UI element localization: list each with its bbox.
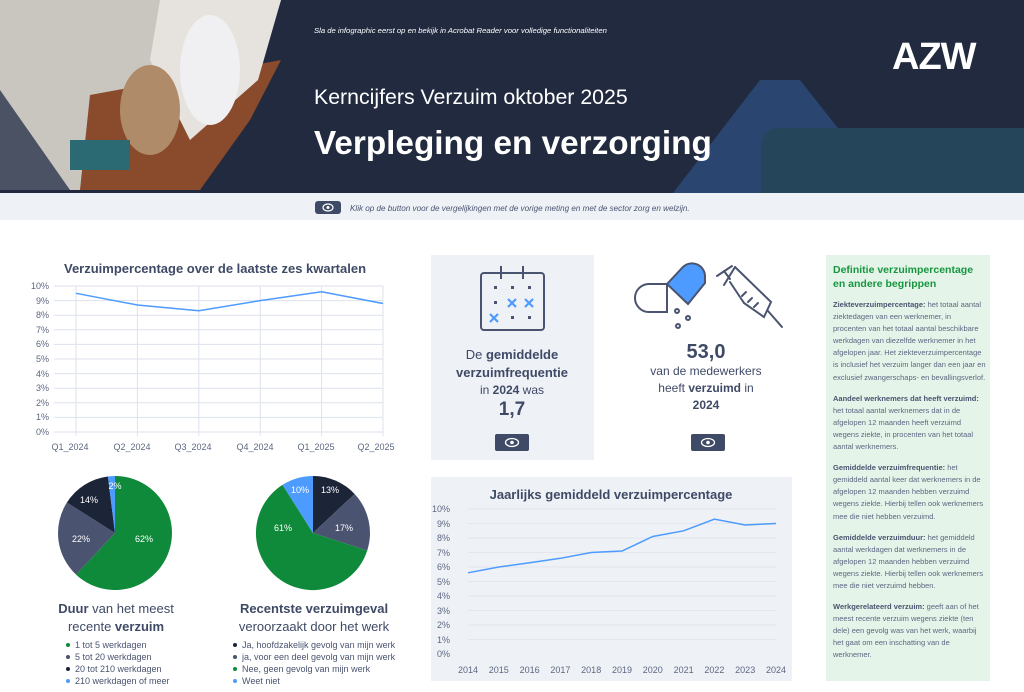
chart: yearly: 2019 [612,665,632,675]
chart: yearly: 3% [437,606,450,616]
panel: definitions: Ziekteverzuimpercentage: het totaal aantal ziektedagen van een werknemer, in procenten van het totaal aantal beschikbare werkdagen van diezelfde werknemer in het afgelopen jaar. Het ziekteverzuimpercentage is inclusief het verzuim langer dan een jaar en exclusief zwangerschaps- en bevallingsverlof. [833,300,986,382]
panel: definitions: Werkgerelateerd verzuim: geeft aan of het meest recente verzuim wegens ziekte (ten dele) een gevolg was van het werk, waarbij het gaat om een inschatting van de werknemer. [833,602,979,659]
chart: quarterly: Q4_2024 [236,442,274,452]
legend: duur: 20 tot 210 werkdagen [75,664,162,674]
icon: calendar [481,266,544,330]
info strip [0,193,1024,220]
chart: yearly: 8% [437,533,450,543]
chart: yearly: 2023 [735,665,755,675]
card: verzuimfrequentie: in 2024 was [480,383,544,397]
legend: duur: 1 tot 5 werkdagen [75,640,147,650]
chart: quarterly: 0% [36,427,49,437]
pie: duur: 22% [72,534,90,544]
chart: yearly: 2022 [704,665,724,675]
chart: quarterly: 1% [36,412,49,422]
chart: quarterly: Q3_2024 [174,442,212,452]
title: Verpleging en verzorging [314,125,712,162]
card: verzuimd: 53,0 [687,341,725,363]
header background [0,0,1024,208]
panel: definitions [826,255,990,681]
legend: werk [233,640,396,686]
pie: werk caption: Recentste verzuimgeval [240,601,388,616]
chart: quarterly: Q2_2025 [357,442,395,452]
chart: yearly: 2017 [550,665,570,675]
chart: yearly: 5% [437,577,450,587]
chart: yearly: 6% [437,562,450,572]
chart: quarterly [31,261,395,452]
card: verzuimfrequentie: De gemiddelde [466,347,558,362]
chart: yearly [431,477,792,681]
chart: quarterly: 4% [36,369,49,379]
info strip: Klik op de button voor de vergelijkingen met de vorige meting en met de sector zorg en welzijn. [350,204,690,213]
header note: Sla de infographic eerst op en bekijk in Acrobat Reader voor volledige functionaliteiten [314,26,607,35]
pie: duur: 62% [135,534,153,544]
chart: yearly: 2024 [766,665,786,675]
card: verzuimfrequentie [431,255,594,460]
chart: yearly: 2015 [489,665,509,675]
chart: yearly: 2020 [643,665,663,675]
panel: definitions: Definitie verzuimpercentage en andere begrippen [833,264,973,290]
subtitle: Kerncijfers Verzuim oktober 2025 [314,85,628,109]
chart: yearly: 10% [432,504,450,514]
chart: quarterly: Verzuimpercentage over de laatste zes kwartalen [64,261,366,276]
chart: quarterly: 10% [31,281,49,291]
chart: quarterly: Q1_2025 [297,442,335,452]
chart: quarterly: Q2_2024 [113,442,151,452]
pie: duur caption: Duur van het meest [58,601,174,616]
card: verzuimfrequentie: 1,7 [499,399,525,420]
card: verzuimd: van de medewerkers [650,364,762,378]
pie: werk: 13% [321,485,339,495]
chart: quarterly: 6% [36,339,49,349]
pie: werk caption [239,601,390,634]
legend: duur: 210 werkdagen of meer [75,676,170,686]
button: eye [495,434,529,451]
chart: yearly: 2% [437,620,450,630]
button: eye [691,434,725,451]
legend: duur: 5 tot 20 werkdagen [75,652,152,662]
chart: yearly: Jaarlijks gemiddeld verzuimpercentage [490,487,732,502]
pie: duur [58,476,172,590]
chart: yearly: 2021 [674,665,694,675]
icon: syringe [717,266,782,327]
chart: yearly: 4% [437,591,450,601]
pie: duur caption: recente verzuim [68,619,164,634]
pie: werk: 61% [274,523,292,533]
chart: quarterly: 5% [36,354,49,364]
card: verzuimd: 2024 [693,398,720,412]
chart: yearly: 7% [437,548,450,558]
pie: duur: 2% [108,481,122,491]
panel: definitions: Gemiddelde verzuimfrequentie: het gemiddeld aantal keer dat werknemers in de afgelopen 12 maanden hebben verzuimd wegens ziekte. Hierbij tellen ook werknemers mee die niet hebben verzuimd. [833,463,983,520]
chart: quarterly: 9% [36,296,49,306]
chart: yearly: 1% [437,635,450,645]
icon: pill [635,263,705,328]
legend: duur [66,640,170,686]
pie: werk: 10% [291,485,309,495]
chart: yearly: 2018 [581,665,601,675]
legend: werk: Nee, geen gevolg van mijn werk [242,664,371,674]
chart: yearly: 9% [437,519,450,529]
chart: quarterly: 3% [36,383,49,393]
pie: duur caption [58,601,174,634]
pie: duur: 14% [80,495,98,505]
chart: yearly: 2014 [458,665,478,675]
legend: werk: Weet niet [242,676,280,686]
chart: yearly: 2016 [520,665,540,675]
chart: quarterly: 2% [36,398,49,408]
chart: quarterly: 7% [36,325,49,335]
card: verzuimfrequentie: verzuimfrequentie [456,365,568,380]
chart: yearly: 0% [437,649,450,659]
card: verzuimd [635,263,782,451]
panel: definitions: Aandeel werknemers dat heeft verzuimd: het totaal aantal werknemers dat in de afgelopen 12 maanden heeft verzuimd wegens ziekte, in procenten van het totaal aantal werknemers. [833,394,979,451]
pie: werk: 17% [335,523,353,533]
card: verzuimd: heeft verzuimd in [658,381,754,395]
pie: werk [256,476,370,590]
header photo [0,0,281,190]
legend: werk: ja, voor een deel gevolg van mijn werk [241,652,396,662]
panel: definitions: Gemiddelde verzuimduur: het gemiddeld aantal werkdagen dat werknemers in de afgelopen 12 maanden hebben verzuimd wegens ziekte. Hierbij tellen ook werknemers mee die niet verzuimd hebben. [833,533,983,590]
chart: quarterly: 8% [36,310,49,320]
logo AZW: AZW [892,36,977,78]
legend: werk: Ja, hoofdzakelijk gevolg van mijn werk [242,640,396,650]
pie: werk caption: veroorzaakt door het werk [239,619,390,634]
chart: quarterly: Q1_2024 [51,442,89,452]
